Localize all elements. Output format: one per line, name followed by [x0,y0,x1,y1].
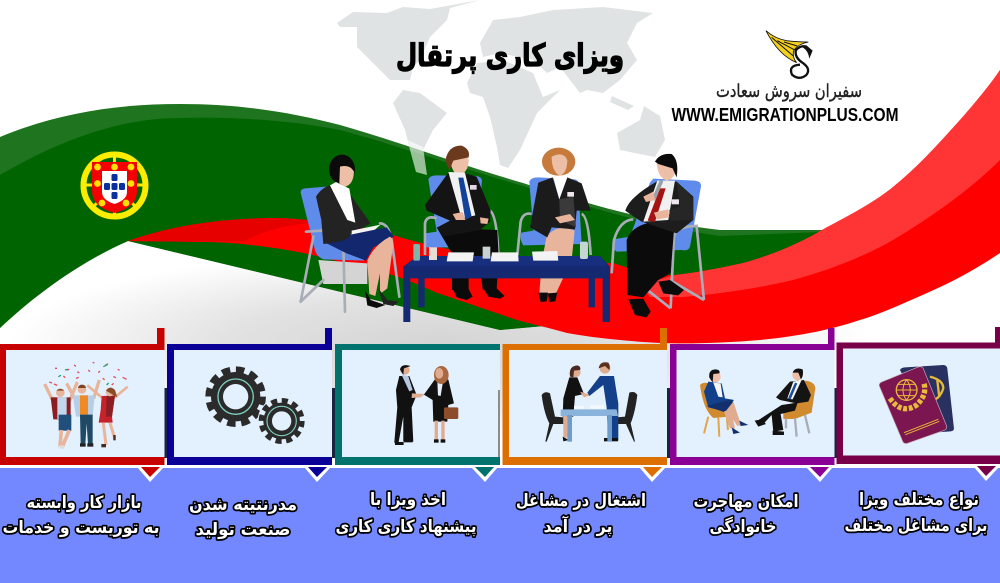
bottom blue band [0,468,1000,583]
icon: two passports [879,365,954,444]
seated man speaking into microphone [612,154,704,317]
label: family immigration: خانوادگی [710,516,776,537]
pointer triangle [973,466,1000,481]
portugal emblem [84,154,146,216]
shield [92,162,137,213]
seated woman with red hair [517,148,591,302]
panel meeting illustration [301,146,704,322]
logo: persian brand name: سفیران سروش سعادت [716,81,862,102]
label: tourism labour market: بازار کار وابسته [26,493,142,513]
flag wave: red band [128,70,1000,343]
label: family immigration [694,492,798,537]
logo: swan emblem [766,31,813,78]
label: manufacturing modernisation [189,495,297,540]
pointer triangle [137,467,164,482]
label: manufacturing modernisation: مدرنتیته شدن [189,495,297,515]
seated man with blue tie [425,146,505,300]
logo: website: WWW.EMIGRATIONPLUS.COM [672,105,898,125]
title: ویزای کاری پرتقال [396,38,624,74]
pointer triangle [639,467,666,482]
label: tourism labour market: به توریست و خدمات [2,518,160,538]
pointer triangle [806,467,833,482]
world map [337,0,665,175]
panel 2: industry modernisation [167,328,335,482]
label: visa via job offer [336,490,476,537]
panel 5: family immigration [670,328,837,482]
icon: business meeting at table [542,362,637,442]
pointer triangle [471,467,498,482]
pointer triangle [304,467,331,482]
label: high income jobs [516,491,646,537]
label: tourism labour market [2,493,160,538]
label: high income jobs: اشتغال در مشاغل [516,491,646,511]
label: family immigration: امکان مهاجرت [694,492,798,512]
gray floor shadow [10,250,870,440]
panel 1: tourism jobs [0,328,167,482]
icon: celebrating people with confetti [45,362,128,449]
panel 4: high income jobs [502,328,670,482]
icon: two people seated in armchairs [700,369,815,437]
label: high income jobs: پر در آمد [544,515,612,537]
icon: business handshake [394,365,458,445]
label: visa via job offer: اخذ ویزا با [370,490,446,510]
label: visa types: نواع مختلف ویزا [859,490,979,510]
seated woman with notebook [301,155,399,312]
label: visa via job offer: پیشنهاد کاری کاری [336,517,476,537]
flag wave: green band [0,104,830,330]
label: visa types [844,490,988,536]
white strip [0,465,1000,468]
panel 3: visa with job offer [335,344,500,482]
panel 6: visa types [836,327,1000,481]
icon: two gears [209,370,306,445]
table with name cards and bottles [403,242,610,322]
label: manufacturing modernisation: صنعت تولید [196,520,290,540]
